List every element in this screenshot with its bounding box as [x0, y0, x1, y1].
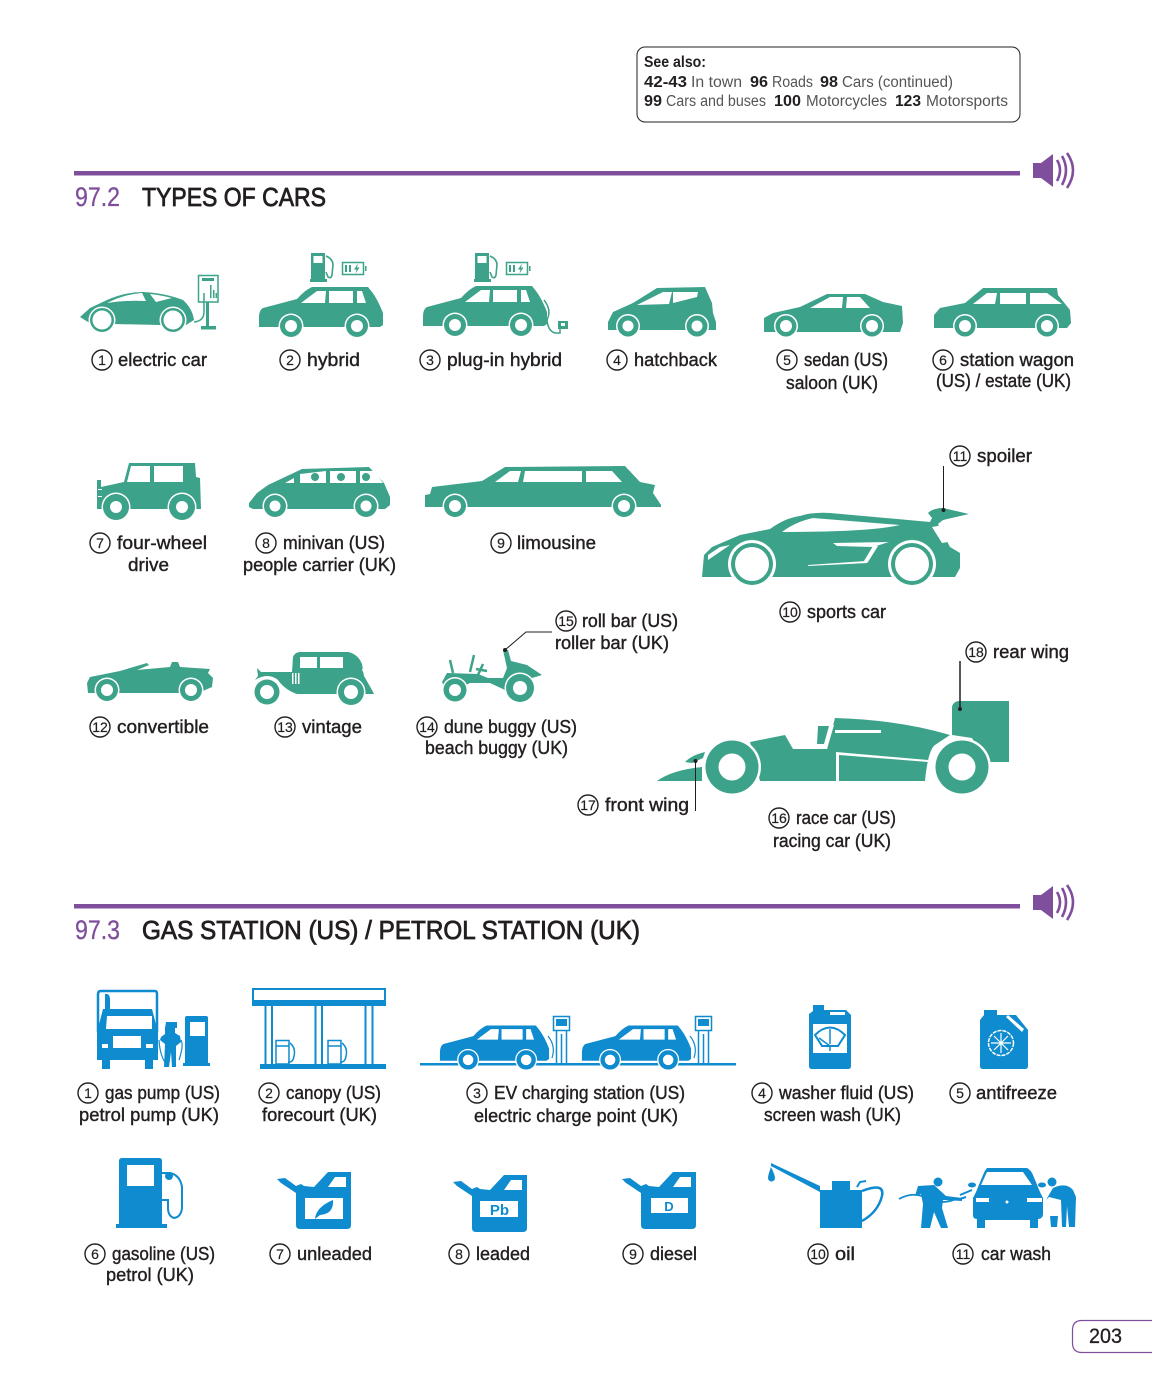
- see also box: 123: [895, 93, 921, 110]
- label: electric car: 1: [98, 352, 106, 368]
- label: minivan people carrier: [243, 533, 396, 575]
- label: oil: [808, 1244, 855, 1264]
- label: leaded: leaded: [476, 1244, 530, 1264]
- icon: minivan: [249, 467, 390, 518]
- icon: EV charging station: [420, 1016, 736, 1071]
- icon: limousine: [425, 466, 661, 518]
- label: hatchback: hatchback: [634, 350, 718, 370]
- label: unleaded: 7: [276, 1246, 284, 1262]
- leader: front wing: [694, 759, 698, 811]
- icon: canopy forecourt: [253, 989, 386, 1069]
- label: sedan saloon: saloon (UK): [786, 373, 878, 393]
- label: convertible: 12: [92, 719, 108, 735]
- leader: roll bar: [503, 632, 552, 652]
- label: gas pump petrol pump: 1: [84, 1085, 92, 1101]
- label: gasoline petrol: petrol (UK): [106, 1265, 194, 1285]
- label: sports car: 10: [782, 604, 798, 620]
- page number: 203: [1089, 1325, 1122, 1348]
- section 97.2 header: [74, 171, 1020, 212]
- label: canopy forecourt: forecourt (UK): [262, 1105, 377, 1125]
- see also box: In town: [691, 74, 742, 91]
- label: sedan saloon: [777, 350, 888, 393]
- label: dune buggy beach buggy: 14: [419, 719, 435, 735]
- icon: convertible: [87, 662, 213, 702]
- label: washer fluid screen wash: 4: [758, 1085, 766, 1101]
- icon: car wash: [899, 1168, 1076, 1228]
- label: vintage: [275, 717, 362, 737]
- label: spoiler: 11: [953, 448, 967, 464]
- icon: dune buggy: [442, 650, 542, 704]
- label: minivan people carrier: 8: [262, 535, 270, 551]
- icon: sedan: [764, 294, 903, 338]
- label: gasoline petrol: 6: [91, 1246, 99, 1262]
- label: canopy forecourt: canopy (US): [286, 1083, 381, 1103]
- label: four-wheel drive: 7: [96, 535, 104, 551]
- label: plug-in hybrid: 3: [426, 352, 434, 368]
- label: car wash: 11: [956, 1246, 970, 1262]
- see also box: Motorsports: [926, 93, 1008, 110]
- label: plug-in hybrid: plug-in hybrid: [447, 350, 562, 370]
- label: rear wing: 18: [968, 644, 984, 660]
- icon: hatchback: [608, 287, 716, 338]
- label: race car racing car: 16: [771, 810, 787, 826]
- section 97.2 header: 97.2: [75, 182, 120, 212]
- see also box: Cars and buses: [666, 93, 766, 110]
- icon: vintage: [253, 652, 374, 706]
- label: minivan people carrier: people carrier (UK): [243, 555, 396, 575]
- section 97.3 header: 97.3: [75, 915, 120, 945]
- icon: four-wheel drive: [97, 463, 201, 522]
- icon: leaded can: [453, 1175, 527, 1232]
- section 97.3 header: [74, 904, 1020, 945]
- see also box: See also:: [644, 54, 706, 71]
- leader: rear wing: [958, 661, 962, 711]
- label: station wagon estate: 6: [939, 352, 947, 368]
- label: roll bar roller bar: roller bar (UK): [555, 633, 669, 653]
- label: electric car: electric car: [118, 350, 207, 370]
- label: dune buggy beach buggy: [417, 717, 577, 758]
- icon: oil can: [768, 1163, 882, 1228]
- see also box: Cars (continued): [842, 74, 953, 91]
- label: vintage: 13: [277, 719, 293, 735]
- label: canopy forecourt: 2: [265, 1085, 273, 1101]
- icon: hybrid: [259, 253, 383, 338]
- label: station wagon estate: station wagon: [960, 350, 1074, 370]
- label: washer fluid screen wash: washer fluid (US): [778, 1083, 914, 1103]
- icon: unleaded can: [277, 1172, 351, 1229]
- label: oil: 10: [810, 1246, 826, 1262]
- see also box: Motorcycles: [806, 93, 887, 110]
- label: EV charging station: 3: [473, 1085, 481, 1101]
- label: four-wheel drive: drive: [128, 555, 169, 575]
- label: diesel: 9: [629, 1246, 637, 1262]
- icon: plug-in hybrid: [423, 253, 568, 338]
- icon: sports car: [702, 508, 969, 588]
- icon: electric car: [80, 276, 218, 334]
- label: roll bar roller bar: [555, 611, 678, 653]
- section 97.2 header: TYPES OF CARS: [142, 182, 326, 212]
- see also box: 99: [644, 93, 662, 110]
- icon: audio speaker: [1033, 885, 1073, 920]
- icon: station wagon: [934, 288, 1071, 338]
- label: race car racing car: [769, 808, 896, 851]
- label: front wing: front wing: [605, 795, 689, 815]
- page number: [1072, 1320, 1152, 1352]
- icon: antifreeze: [980, 1010, 1028, 1069]
- label: spoiler: [950, 446, 1032, 466]
- label: EV charging station: [467, 1083, 685, 1126]
- label: antifreeze: 5: [956, 1085, 964, 1101]
- label: front wing: 17: [580, 797, 596, 813]
- label: rear wing: rear wing: [993, 642, 1069, 662]
- label: vintage: vintage: [302, 717, 362, 737]
- label: spoiler: spoiler: [977, 446, 1032, 466]
- label: gas pump petrol pump: [78, 1083, 220, 1125]
- label: gasoline petrol: [85, 1244, 215, 1285]
- label: diesel: [623, 1244, 697, 1264]
- label: leaded: [449, 1244, 530, 1264]
- label: EV charging station: EV charging station (US): [494, 1083, 685, 1103]
- section 97.3 header: GAS STATION (US) / PETROL STATION (UK): [142, 915, 640, 945]
- label: gas pump petrol pump: petrol pump (UK): [79, 1105, 219, 1125]
- label: car wash: [953, 1244, 1051, 1264]
- label: four-wheel drive: four-wheel: [117, 533, 207, 553]
- label: hatchback: 4: [613, 352, 621, 368]
- label: station wagon estate: (US) / estate (UK): [936, 371, 1071, 391]
- label: minivan people carrier: minivan (US): [283, 533, 385, 553]
- label: roll bar roller bar: roll bar (US): [582, 611, 678, 631]
- icon: audio speaker: [1033, 153, 1073, 188]
- label: leaded: 8: [455, 1246, 463, 1262]
- label: race car racing car: race car (US): [796, 808, 896, 828]
- label: sedan saloon: sedan (US): [804, 350, 888, 370]
- leader: spoiler: [942, 466, 946, 512]
- see also box: 42-43: [644, 74, 687, 91]
- icon: leaded can: Pb: [490, 1202, 509, 1219]
- label: washer fluid screen wash: [752, 1083, 914, 1125]
- see also box: 98: [820, 74, 838, 91]
- label: washer fluid screen wash: screen wash (UK): [764, 1105, 901, 1125]
- label: race car racing car: racing car (UK): [773, 831, 891, 851]
- icon: diesel can: D: [664, 1199, 674, 1214]
- label: EV charging station: electric charge point (UK): [474, 1106, 678, 1126]
- see also box: [637, 47, 1020, 122]
- label: car wash: car wash: [981, 1244, 1051, 1264]
- label: hybrid: hybrid: [307, 350, 360, 370]
- label: gasoline petrol: gasoline (US): [112, 1244, 215, 1264]
- label: canopy forecourt: [259, 1083, 381, 1125]
- label: antifreeze: antifreeze: [976, 1083, 1057, 1103]
- icon: gasoline pump: [116, 1158, 182, 1228]
- icon: washer fluid: [809, 1005, 851, 1069]
- icon: race car: [657, 701, 1009, 796]
- label: roll bar roller bar: 15: [558, 613, 574, 629]
- label: station wagon estate: [933, 350, 1074, 391]
- label: unleaded: unleaded: [297, 1244, 372, 1264]
- icon: gas pump truck: [97, 991, 210, 1069]
- label: diesel: diesel: [650, 1244, 697, 1264]
- label: oil: oil: [835, 1244, 855, 1264]
- label: limousine: limousine: [517, 533, 596, 553]
- label: limousine: 9: [497, 535, 505, 551]
- see also box: 96: [750, 74, 768, 91]
- icon: diesel can: [622, 1172, 696, 1229]
- label: sedan saloon: 5: [783, 352, 791, 368]
- label: hybrid: [280, 350, 360, 370]
- label: dune buggy beach buggy: dune buggy (US): [444, 717, 577, 737]
- label: gas pump petrol pump: gas pump (US): [105, 1083, 220, 1103]
- label: dune buggy beach buggy: beach buggy (UK): [425, 738, 568, 758]
- label: convertible: convertible: [117, 717, 209, 737]
- see also box: 100: [774, 93, 801, 110]
- label: four-wheel drive: [90, 533, 207, 575]
- label: sports car: sports car: [807, 602, 886, 622]
- see also box: Roads: [772, 74, 813, 91]
- label: hybrid: 2: [286, 352, 294, 368]
